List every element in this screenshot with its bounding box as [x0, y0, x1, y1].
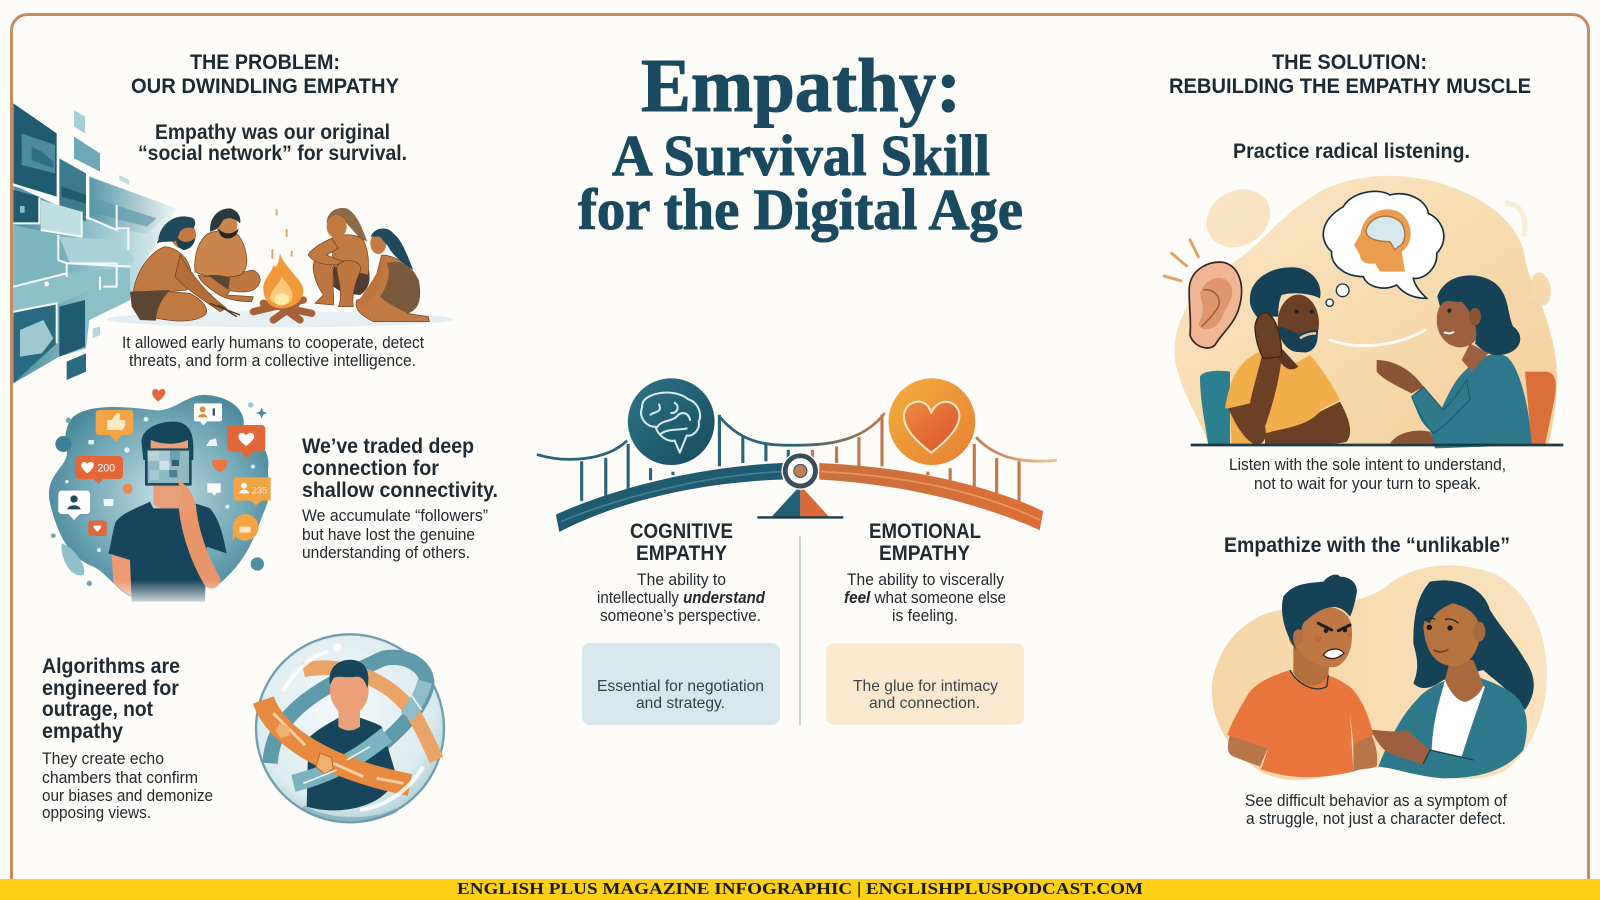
text: algorithms: empathy [42, 720, 123, 743]
icon: 200 likes bubble: 200 [97, 462, 115, 474]
column: emotional empathy [826, 520, 1024, 725]
icon: 200 likes bubble [75, 456, 123, 484]
person: angry man [1227, 575, 1377, 777]
callout: intimacy: The glue for intimacy [853, 678, 998, 695]
person: kneeling woman [356, 229, 429, 322]
icon: brain [628, 378, 715, 465]
subheading: original social network: Empathy was our original [155, 121, 390, 144]
column: emotional empathy: is feeling. [892, 607, 958, 625]
callout: negotiation: and strategy. [636, 695, 725, 712]
person with shirt [108, 422, 227, 602]
caption: listening: not to wait for your turn to speak. [1254, 475, 1481, 493]
caption: unlikable: a struggle, not just a character defect. [1246, 810, 1506, 828]
illustration: digital wedge [13, 103, 177, 383]
heading: the solution [1169, 51, 1531, 98]
divider [799, 536, 801, 725]
table [1191, 441, 1563, 449]
subheading: unlikable: Empathize with the “unlikable” [1224, 534, 1510, 557]
panel: the solution [1164, 51, 1563, 828]
footer bar [0, 879, 1600, 900]
column: emotional empathy: EMPATHY [879, 542, 970, 565]
text: algorithms [42, 655, 213, 822]
footer bar: ENGLISH PLUS MAGAZINE INFOGRAPHIC | ENGLISHPLUSPODCAST.COM [457, 879, 1143, 898]
text: traded deep connection: connection for [302, 457, 439, 480]
illustration: radical listening conversation [1164, 176, 1563, 448]
person: empathetic woman [1372, 580, 1534, 778]
icon: user bubble [194, 403, 222, 425]
column: cognitive empathy: COGNITIVE [630, 520, 733, 543]
person: man with stick [130, 216, 240, 321]
heading: the problem [131, 51, 399, 98]
text: algorithms: our biases and demonize [42, 787, 213, 805]
illustration: early humans around a campfire [107, 208, 453, 327]
panel: two kinds of empathy [537, 378, 1057, 725]
subheading: original social network [138, 121, 407, 165]
callout: negotiation [582, 643, 780, 725]
person: crouching figure [308, 208, 370, 307]
illustration: person in filter bubble [256, 634, 444, 822]
caption: early humans: It allowed early humans to cooperate, detect [122, 334, 424, 352]
subheading: original social network: “social network” for survival. [138, 142, 407, 165]
icon: 235 followers bubble: 235 [252, 485, 267, 495]
text: algorithms: chambers that confirm [42, 769, 198, 787]
text: algorithms: engineered for [42, 677, 179, 700]
column: cognitive empathy: someone’s perspective. [600, 607, 761, 625]
heading: the problem: THE PROBLEM: [190, 51, 340, 74]
callout: intimacy: and connection. [869, 695, 980, 712]
caption: early humans: threats, and form a collective intelligence. [129, 352, 416, 370]
caption: listening: Listen with the sole intent to understand, [1229, 456, 1506, 474]
text: traded deep connection: understanding of others. [302, 544, 470, 562]
title: for the Digital Age [578, 177, 1023, 242]
caption: unlikable [1245, 792, 1507, 828]
column: emotional empathy: The ability to viscerally [847, 571, 1005, 589]
heading: the problem: OUR DWINDLING EMPATHY [131, 75, 399, 98]
text: traded deep connection: We accumulate “followers” [302, 507, 488, 525]
icon: ear [1189, 262, 1242, 348]
icon: thumbs-up bubble [96, 410, 133, 442]
title: Empathy: [641, 44, 961, 128]
heading: the solution: THE SOLUTION: [1272, 51, 1427, 74]
text: traded deep connection [302, 435, 498, 562]
title: A Survival Skill [612, 123, 990, 188]
subheading: radical listening: Practice radical listening. [1233, 140, 1470, 163]
callout: intimacy [826, 643, 1024, 725]
caption: early humans [122, 334, 424, 370]
callout: negotiation: Essential for negotiation [597, 678, 764, 695]
text: traded deep connection: but have lost the genuine [302, 526, 475, 544]
icon: heart bubble [227, 425, 265, 459]
illustration: man behind pixelated mask in social media cloud [49, 389, 271, 608]
text: algorithms: They create echo [42, 750, 164, 768]
icon: campfire [253, 210, 312, 320]
heading: the solution: REBUILDING THE EMPATHY MUSCLE [1169, 75, 1531, 98]
icon: 235 followers bubble [233, 477, 271, 505]
person: bearded man cross-legged [195, 208, 260, 302]
text: algorithms: Algorithms are [42, 655, 180, 678]
text: traded deep connection: shallow connectivity. [302, 479, 498, 502]
icon: heart [152, 389, 165, 402]
caption: unlikable: See difficult behavior as a symptom of [1245, 792, 1507, 810]
illustration: empathizing with angry man [1212, 565, 1547, 780]
column: cognitive empathy: The ability to [637, 571, 726, 589]
caption: listening [1229, 456, 1506, 493]
panel: the problem [13, 51, 498, 822]
icon: sound rays [1164, 240, 1198, 281]
text: algorithms: outrage, not [42, 698, 153, 721]
icon: profile bubble [58, 491, 90, 520]
person: listener [1200, 267, 1350, 446]
icon: heart [889, 378, 975, 465]
person: speaker [1377, 275, 1556, 448]
column: cognitive empathy [582, 520, 780, 725]
text: algorithms: opposing views. [42, 804, 151, 822]
bridge illustration [537, 378, 1057, 532]
text: traded deep connection: We’ve traded deep [302, 435, 474, 458]
title [578, 44, 1023, 242]
column: cognitive empathy: EMPATHY [636, 542, 727, 565]
column: cognitive empathy: intellectually understand [597, 589, 766, 607]
column: emotional empathy: EMOTIONAL [869, 520, 981, 543]
column: emotional empathy: feel what someone else [844, 589, 1006, 607]
icon: thought bubble with head [1323, 191, 1444, 306]
